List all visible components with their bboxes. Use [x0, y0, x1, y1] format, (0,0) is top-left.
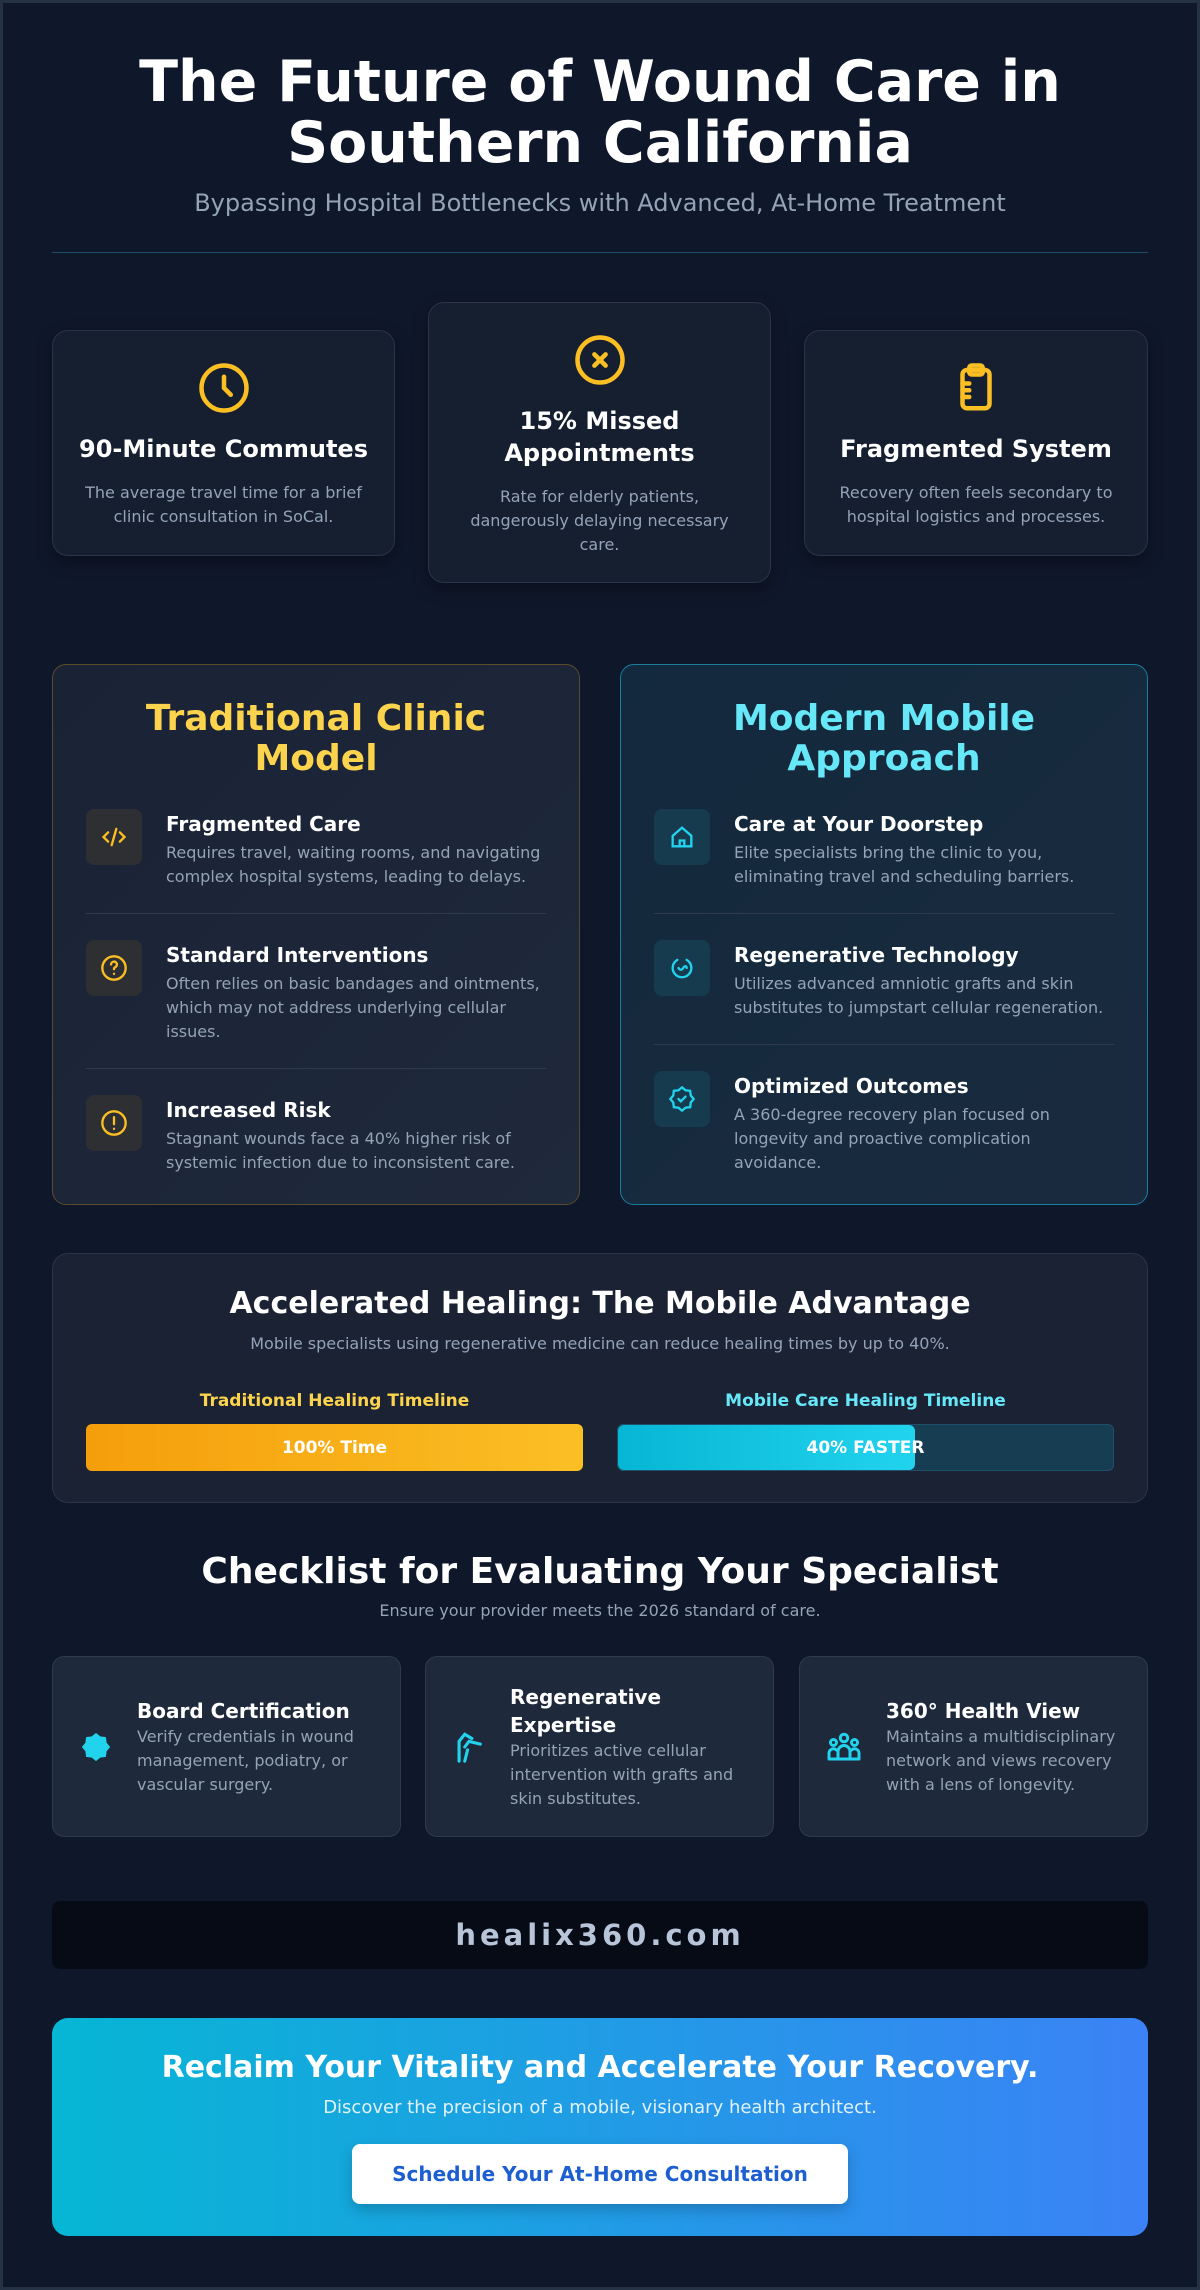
chart: mobile bar: Mobile Care Healing Timeline	[725, 1391, 1006, 1411]
stat card: commutes: clinic consultation in SoCal.	[114, 507, 333, 526]
stat card: commutes: The average travel time for a brief	[85, 483, 362, 502]
heading: modern: Modern Mobile	[733, 698, 1035, 739]
item: doorstep	[654, 809, 1114, 914]
stat card: missed appointments: Appointments	[504, 439, 695, 467]
item: regenerative	[654, 940, 1114, 1045]
heading: traditional: Traditional Clinic	[146, 698, 486, 739]
stat card: missed appointments: 15% Missed	[520, 407, 679, 435]
panel: traditional clinic	[52, 664, 580, 1205]
chart: mobile bar: 40% FASTER	[806, 1438, 924, 1458]
title: The Future of Wound Care in	[139, 49, 1061, 115]
CTA button: Schedule Your At-Home Consultation	[392, 2162, 808, 2186]
panel: accelerated healing	[52, 1253, 1148, 1503]
heading: healing: Accelerated Healing: The Mobile Advantage	[229, 1286, 971, 1321]
item: outcomes	[654, 1071, 1050, 1172]
stat card: missed appointments: care.	[580, 535, 619, 554]
checklist card: board certification: Board Certification	[137, 1698, 350, 1722]
stat card: missed appointments	[428, 302, 771, 583]
title	[139, 49, 1061, 176]
checklist card: regenerative expertise: Regenerative	[510, 1684, 661, 1708]
subtitle: Bypassing Hospital Bottlenecks with Advanced, At-Home Treatment	[194, 189, 1006, 217]
item: doorstep: Care at Your Doorstep	[734, 812, 983, 836]
panel: modern mobile	[620, 664, 1148, 1205]
stat card: fragmented system: Fragmented System	[840, 435, 1112, 463]
text: checklist subtitle: Ensure your provider meets the 2026 standard of care.	[379, 1601, 821, 1620]
stat card: fragmented system: Recovery often feels secondary to	[839, 483, 1112, 502]
heading: traditional	[146, 698, 486, 779]
icon: people	[828, 1732, 860, 1760]
title: Southern California	[287, 110, 913, 176]
item: increased risk: Stagnant wounds face a 40% higher risk of systemic infection due to inconsistent care.	[166, 1129, 515, 1172]
brand bar	[52, 1901, 1148, 1969]
icon: x circle	[575, 335, 625, 385]
stat card: missed appointments: Rate for elderly patients,	[500, 487, 699, 506]
checklist card: regenerative expertise: Expertise	[510, 1712, 616, 1736]
checklist card: regenerative expertise: Prioritizes active cellular intervention with grafts and skin substitutes.	[510, 1740, 733, 1808]
item: fragmented care: Requires travel, waiting rooms, and navigating complex hospital systems, leading to delays.	[166, 843, 540, 886]
checklist card: board certification	[52, 1656, 401, 1837]
item: increased risk: Increased Risk	[166, 1098, 331, 1122]
item: regenerative: Regenerative Technology	[734, 943, 1019, 967]
stat card: commutes	[52, 330, 395, 556]
CTA banner	[52, 2018, 1148, 2236]
stat card: fragmented system	[804, 330, 1148, 556]
item: fragmented care: Fragmented Care	[166, 812, 361, 836]
checklist card: board certification: Verify credentials in wound management, podiatry, or vascular surgery.	[137, 1726, 354, 1794]
CTA text: Discover the precision of a mobile, visionary health architect.	[323, 2097, 877, 2118]
item: increased risk	[86, 1095, 515, 1172]
checklist card: 360 view: Maintains a multidisciplinary network and views recovery with a lens of longevity.	[886, 1726, 1115, 1794]
chart: traditional bar: Traditional Healing Timeline	[200, 1391, 469, 1411]
checklist card: 360 view	[799, 1656, 1148, 1837]
stat card: missed appointments: dangerously delaying necessary	[470, 511, 729, 530]
checklist card: regenerative expertise	[425, 1656, 774, 1837]
item: standard interventions	[86, 940, 546, 1069]
heading: checklist: Checklist for Evaluating Your Specialist	[201, 1551, 999, 1592]
icon: badge	[82, 1733, 110, 1761]
text: healing subtitle: Mobile specialists using regenerative medicine can reduce healing times by up to 40%.	[250, 1334, 950, 1353]
item: doorstep: Elite specialists bring the clinic to you, eliminating travel and scheduling barriers.	[734, 843, 1074, 886]
CTA button	[352, 2144, 848, 2204]
heading: modern: Approach	[787, 738, 981, 779]
icon: clipboard	[960, 363, 992, 410]
item: standard interventions: Often relies on basic bandages and ointments, which may not address underlying cellular issues.	[166, 974, 540, 1041]
item: fragmented care	[86, 809, 546, 914]
chart: mobile bar	[617, 1391, 1114, 1471]
stat card: fragmented system: hospital logistics and processes.	[847, 507, 1105, 526]
item: outcomes: Optimized Outcomes	[734, 1074, 969, 1098]
checklist card: 360 view: 360° Health View	[886, 1698, 1080, 1722]
CTA heading: Reclaim Your Vitality and Accelerate Your Recovery.	[162, 2050, 1038, 2085]
icon: clock	[199, 363, 249, 413]
brand bar: healix360.com	[455, 1918, 745, 1952]
chart: traditional bar: 100% Time	[282, 1438, 387, 1458]
heading: traditional: Model	[254, 738, 378, 779]
chart: traditional bar	[86, 1391, 583, 1471]
item: standard interventions: Standard Interventions	[166, 943, 428, 967]
icon: hand	[458, 1732, 482, 1763]
item: regenerative: Utilizes advanced amniotic grafts and skin substitutes to jumpstart cellular regeneration.	[734, 974, 1103, 1017]
stat card: commutes: 90-Minute Commutes	[79, 435, 368, 463]
heading: modern	[733, 698, 1035, 779]
item: outcomes: A 360-degree recovery plan focused on longevity and proactive complication avoidance.	[734, 1105, 1050, 1172]
